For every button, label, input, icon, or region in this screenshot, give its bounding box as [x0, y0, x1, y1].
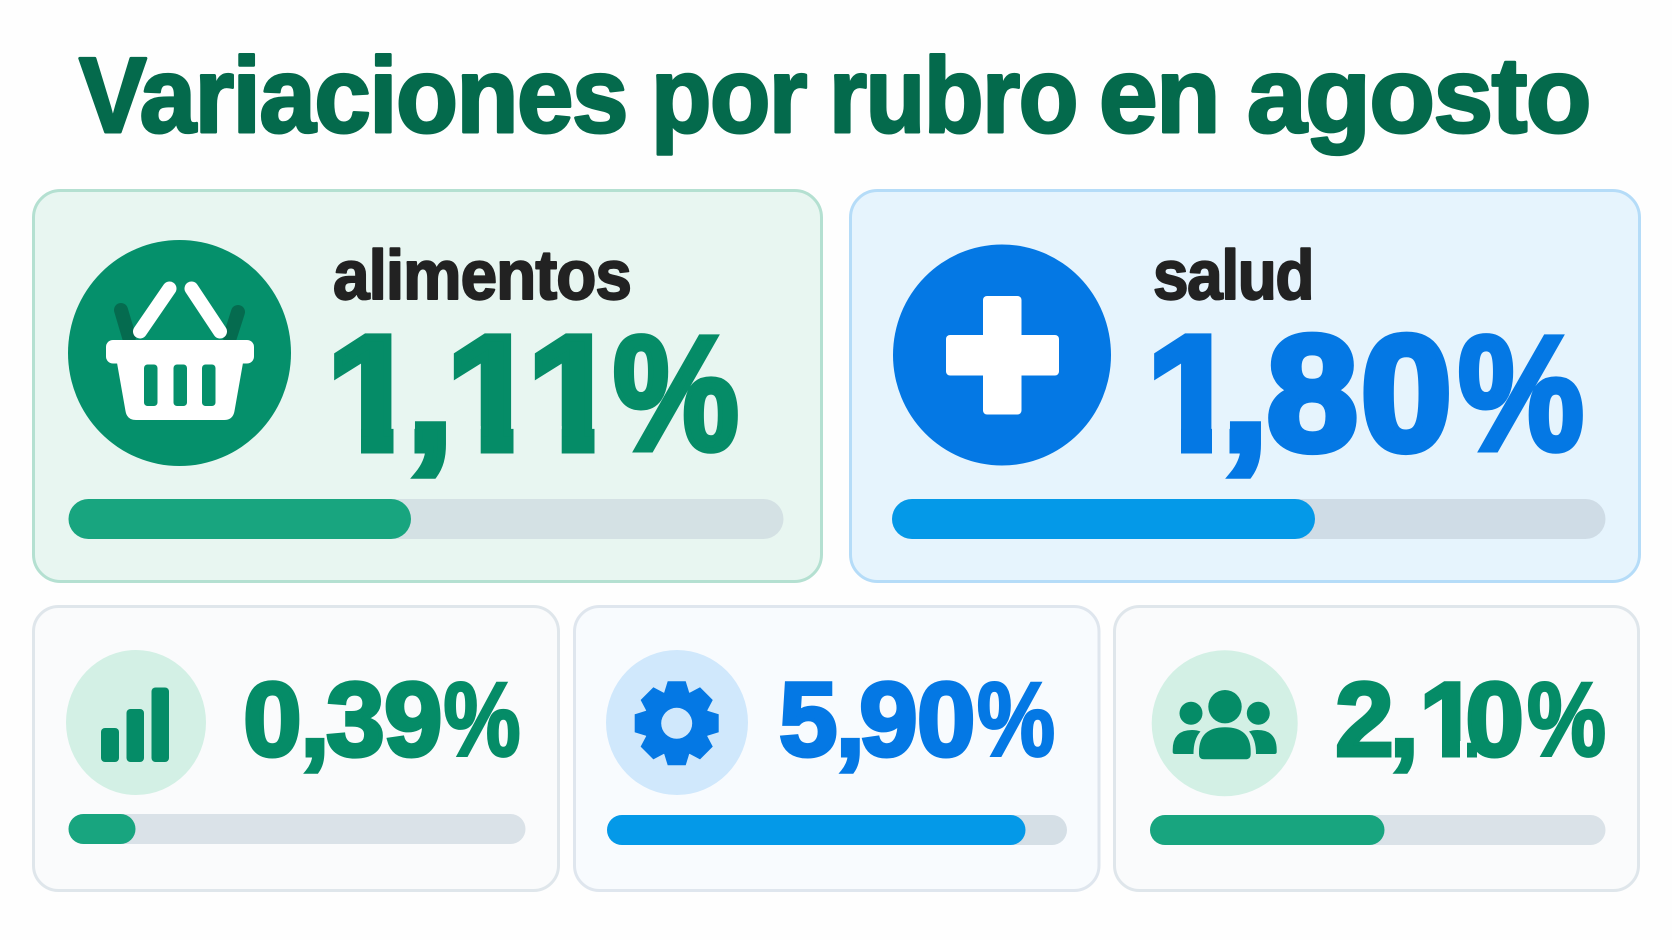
- salud card background: [850, 190, 1640, 582]
- card background: [34, 606, 558, 890]
- value: %: [1527, 662, 1606, 779]
- progress bar: [68, 814, 526, 844]
- salud value: 1,80: [1147, 302, 1452, 484]
- salud value: [1147, 302, 1584, 484]
- icon: medical cross: [893, 244, 1111, 466]
- alimentos value: %: [613, 302, 739, 484]
- title: Variaciones: [79, 35, 627, 155]
- panel: 0,39%: [34, 606, 558, 890]
- alimentos value: 1,11: [327, 302, 618, 484]
- icon: gear: [606, 650, 748, 795]
- value: %: [977, 662, 1055, 779]
- value: %: [444, 662, 520, 779]
- panel: 5,90%: [574, 606, 1099, 890]
- panel: alimentos: [34, 190, 822, 582]
- title: en: [1099, 35, 1219, 155]
- progress bar: [607, 815, 1067, 845]
- alimentos progress bar: [68, 499, 784, 539]
- value: 5,90: [779, 662, 975, 779]
- title: rubro: [829, 35, 1077, 155]
- icon: people group: [1152, 650, 1298, 796]
- salud progress bar: [892, 499, 1606, 539]
- panel: salud: [850, 190, 1640, 582]
- value: 0,39: [243, 662, 442, 779]
- title: agosto: [1247, 35, 1590, 155]
- alimentos label: alimentos: [333, 236, 631, 314]
- value: 2,10: [1335, 662, 1524, 779]
- icon: shopping basket: [68, 240, 291, 466]
- card background: [574, 606, 1099, 890]
- title: por: [651, 35, 807, 155]
- icon: bar signal: [66, 650, 206, 795]
- value: [1335, 662, 1606, 779]
- card background: [1114, 606, 1638, 890]
- panel: 2,10%: [1114, 606, 1638, 890]
- alimentos card background: [34, 190, 822, 582]
- salud label: salud: [1153, 236, 1313, 314]
- salud value: %: [1458, 302, 1584, 484]
- progress bar: [1150, 815, 1606, 845]
